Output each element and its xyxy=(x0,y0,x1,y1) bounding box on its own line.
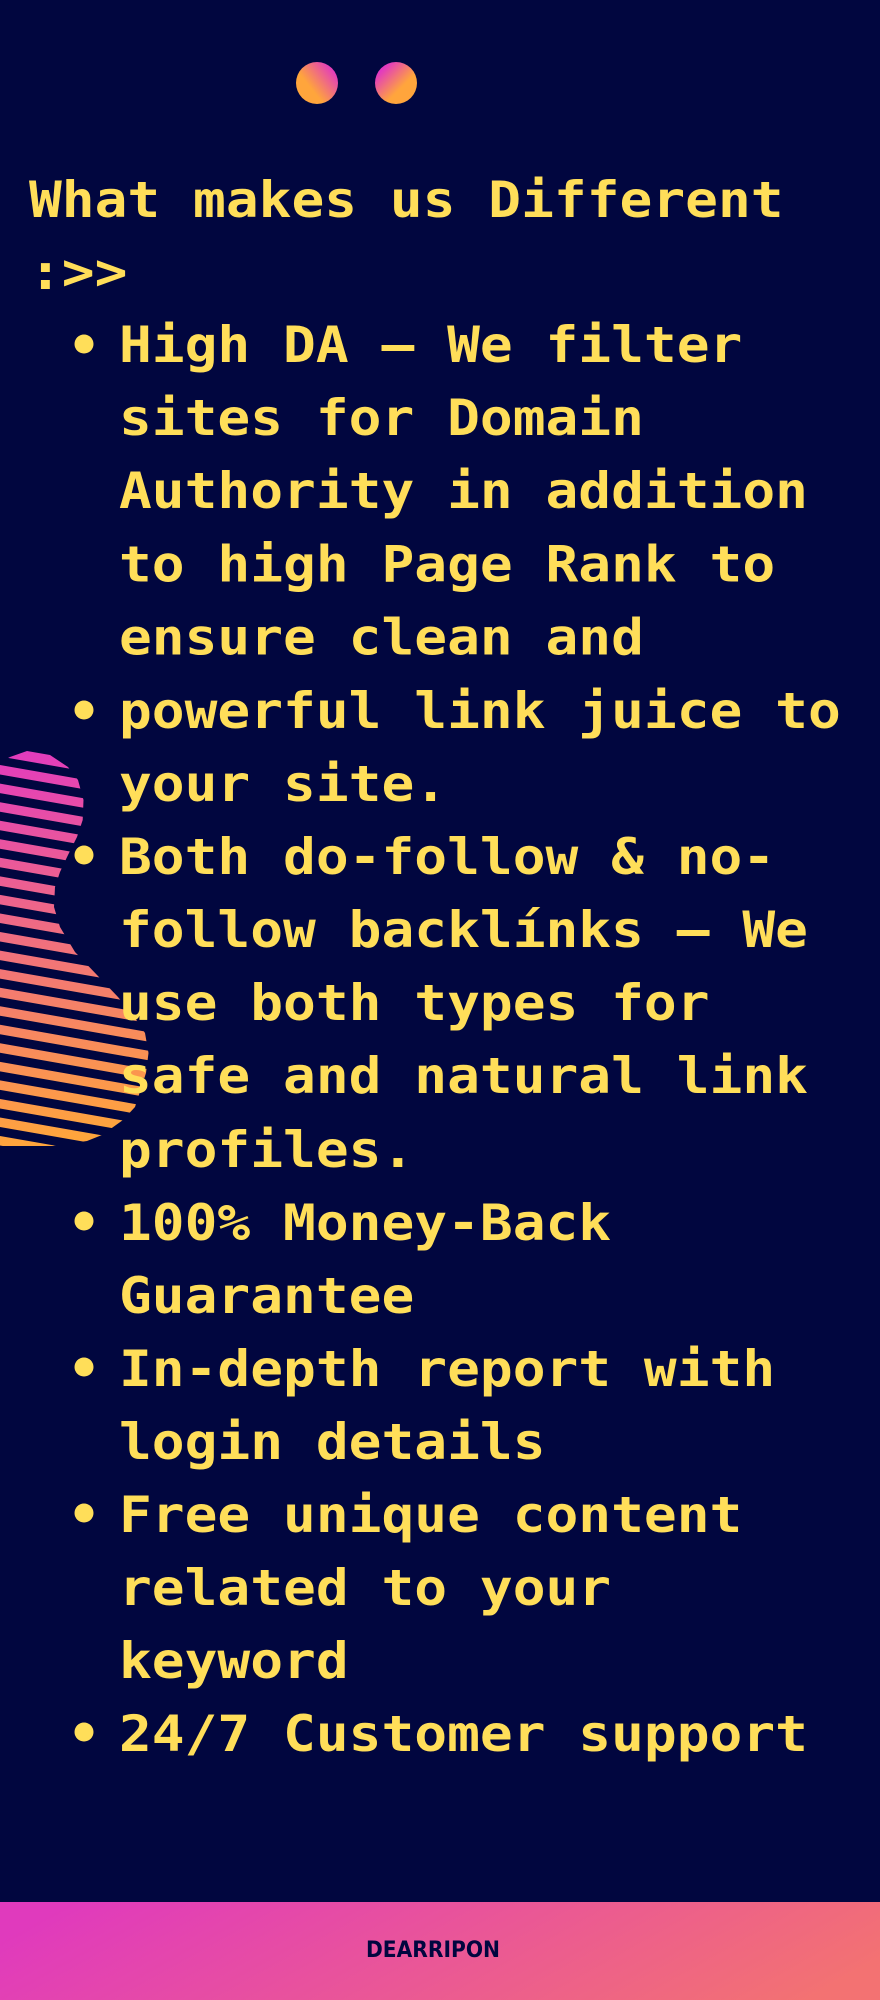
list item: in-depth report: login details xyxy=(119,1413,546,1471)
list item: money-back guarantee xyxy=(74,1194,611,1325)
list item: do-follow and no-follow backlinks: safe and natural link xyxy=(119,1047,808,1105)
list item: link juice: powerful link juice to xyxy=(119,682,841,740)
list item: free content: related to your xyxy=(119,1559,611,1617)
icon: gradient dots xyxy=(296,62,417,104)
list item: high DA: to high Page Rank to xyxy=(119,536,775,594)
decorative striped blob xyxy=(0,751,148,1146)
list item: high DA: High DA – We filter xyxy=(119,316,742,374)
heading xyxy=(29,171,784,301)
list item: money-back guarantee: Guarantee xyxy=(119,1267,414,1325)
list item: free content: Free unique content xyxy=(119,1486,742,1544)
list item: do-follow and no-follow backlinks xyxy=(74,828,808,1179)
list item: free content xyxy=(74,1486,742,1690)
list item: high DA: ensure clean and xyxy=(119,609,644,667)
list item: high DA: Authority in addition xyxy=(119,462,808,520)
footer brand text: DEARRIPON xyxy=(366,1938,500,1963)
list item: free content: keyword xyxy=(119,1632,349,1690)
list item: link juice: your site. xyxy=(119,755,447,813)
heading: What makes us Different xyxy=(29,171,784,229)
list item: high DA: sites for Domain xyxy=(119,389,644,447)
list item: customer support: 24/7 Customer support xyxy=(119,1705,808,1763)
list item: link juice xyxy=(74,682,841,813)
list item: high DA xyxy=(74,316,808,667)
list item: do-follow and no-follow backlinks: Both do-follow & no- xyxy=(119,828,775,886)
list item: do-follow and no-follow backlinks: profiles. xyxy=(119,1121,414,1179)
list item: do-follow and no-follow backlinks: follow backlínks – We xyxy=(119,901,808,959)
heading: :>> xyxy=(29,243,127,301)
list item: in-depth report xyxy=(74,1340,775,1471)
footer bar xyxy=(0,1902,880,2000)
list item: money-back guarantee: 100% Money-Back xyxy=(119,1194,611,1252)
list item: in-depth report: In-depth report with xyxy=(119,1340,775,1398)
list item: do-follow and no-follow backlinks: use both types for xyxy=(119,974,710,1032)
